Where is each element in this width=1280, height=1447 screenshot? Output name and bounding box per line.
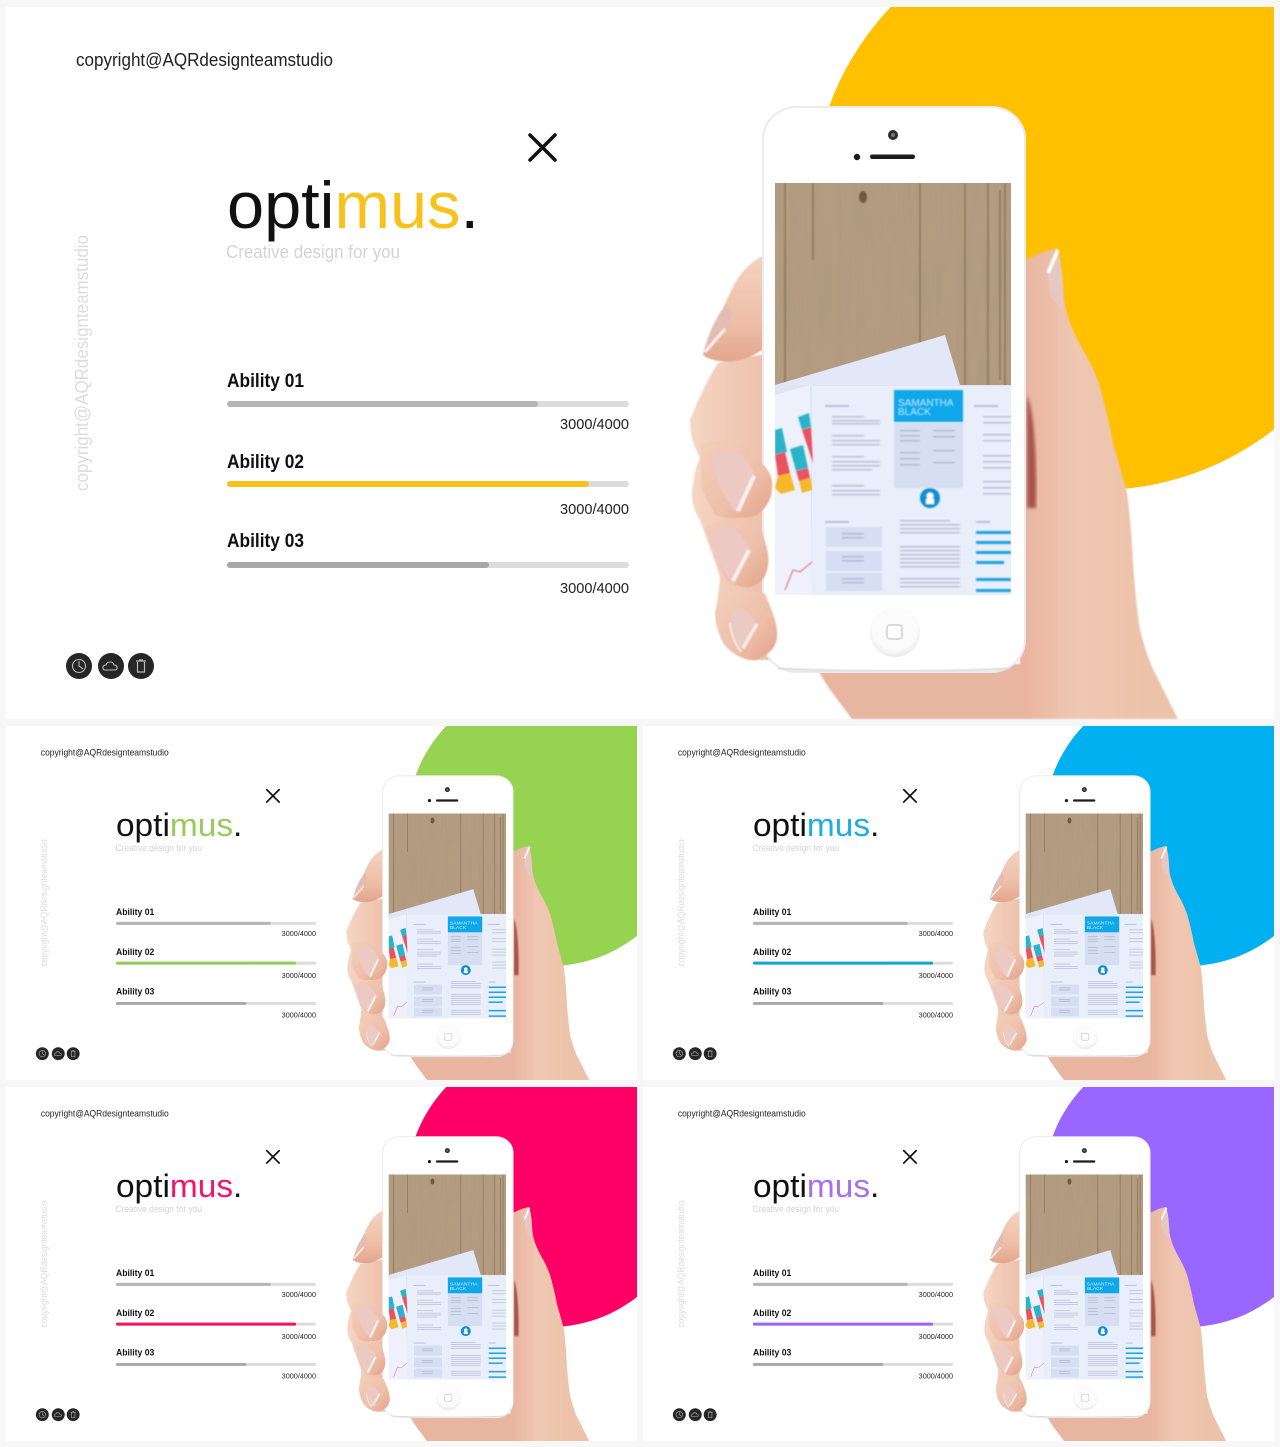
pink circle — [416, 1087, 637, 1326]
ability 01: Ability 01 — [116, 1268, 154, 1279]
ability 03: 3000/4000 — [919, 1371, 953, 1380]
subtitle: Creative design for you — [115, 843, 202, 853]
copyright note: copyright@AQRdesignteamstudio — [41, 1108, 169, 1118]
vertical watermark: copyright@AQRdesignteamstudio — [72, 235, 92, 491]
green circle — [416, 726, 637, 966]
ability 03 — [116, 986, 316, 1019]
ability 01: 3000/4000 — [560, 416, 629, 433]
ability 01: Ability 01 — [753, 1268, 791, 1279]
ability 01: Ability 01 — [116, 907, 154, 918]
ability 03: Ability 03 — [227, 531, 304, 552]
screen heading: SAMANTHA — [1087, 1282, 1114, 1287]
ability 03: Ability 03 — [116, 986, 154, 997]
ability 02: Ability 02 — [227, 452, 304, 473]
ability 01 — [753, 907, 953, 938]
title: optimus. — [116, 1167, 242, 1204]
ability 03: 3000/4000 — [919, 1010, 953, 1019]
screen heading: SAMANTHA — [450, 1282, 477, 1287]
close icon — [267, 790, 279, 802]
ability 03 — [116, 1347, 316, 1380]
subtitle: Creative design for you — [752, 843, 839, 853]
hand holding phone — [346, 1137, 589, 1441]
subtitle: Creative design for you — [226, 242, 400, 262]
copyright note: copyright@AQRdesignteamstudio — [76, 50, 333, 70]
ability 02 — [116, 947, 316, 980]
ability 03 — [753, 1347, 953, 1380]
ability 01: 3000/4000 — [282, 1290, 316, 1299]
title: optimus. — [227, 168, 479, 242]
vertical watermark: copyright@AQRdesignteamstudio — [39, 1200, 49, 1328]
ability 01 — [116, 907, 316, 938]
ability 02: Ability 02 — [753, 947, 791, 958]
icon row — [66, 653, 154, 679]
screen heading: BLACK — [450, 925, 467, 931]
ability 03 — [753, 986, 953, 1019]
hand holding phone — [983, 776, 1226, 1080]
ability 01 — [227, 371, 629, 433]
title: optimus. — [116, 806, 242, 843]
purple circle — [1052, 1087, 1274, 1326]
panel: purple slide — [672, 1087, 1274, 1441]
screen heading: BLACK — [1087, 1286, 1104, 1292]
panel: yellow main slide — [6, 0, 1280, 719]
screen heading: SAMANTHA — [450, 921, 477, 926]
title: optimus. — [753, 806, 879, 843]
yellow circle — [812, 0, 1280, 490]
ability 02 — [116, 1308, 316, 1341]
close icon — [904, 1151, 916, 1163]
ability 02: 3000/4000 — [560, 501, 629, 518]
ability 03 — [227, 531, 629, 597]
ability 02 — [753, 1308, 953, 1341]
ability 02: 3000/4000 — [282, 1332, 316, 1341]
close icon — [904, 790, 916, 802]
close icon — [267, 1151, 279, 1163]
screen heading: SAMANTHA — [898, 398, 954, 409]
ability 03: Ability 03 — [753, 986, 791, 997]
panel: pink slide — [36, 1087, 637, 1441]
ability 01: 3000/4000 — [282, 929, 316, 938]
ability 03: 3000/4000 — [560, 580, 629, 597]
ability 02: Ability 02 — [753, 1308, 791, 1319]
copyright note: copyright@AQRdesignteamstudio — [678, 747, 806, 757]
vertical watermark: copyright@AQRdesignteamstudio — [39, 839, 49, 967]
subtitle: Creative design for you — [752, 1204, 839, 1214]
ability 02: Ability 02 — [116, 1308, 154, 1319]
ability 02: 3000/4000 — [919, 1332, 953, 1341]
screen heading: BLACK — [450, 1286, 467, 1292]
ability 01: Ability 01 — [753, 907, 791, 918]
hand holding phone — [983, 1137, 1226, 1441]
ability 02: 3000/4000 — [282, 971, 316, 980]
ability 02 — [753, 947, 953, 980]
blue circle — [1052, 726, 1274, 966]
ability 01: 3000/4000 — [919, 1290, 953, 1299]
panel: blue slide — [672, 726, 1274, 1080]
ability 01 — [116, 1268, 316, 1299]
ability 02: Ability 02 — [116, 947, 154, 958]
copyright note: copyright@AQRdesignteamstudio — [678, 1108, 806, 1118]
ability 03: 3000/4000 — [282, 1010, 316, 1019]
icon row — [673, 1047, 717, 1060]
ability 01: 3000/4000 — [919, 929, 953, 938]
title: optimus. — [753, 1167, 879, 1204]
icon row — [36, 1047, 80, 1060]
ability 03: Ability 03 — [116, 1347, 154, 1358]
icon row — [673, 1408, 717, 1421]
ability 03: 3000/4000 — [282, 1371, 316, 1380]
subtitle: Creative design for you — [115, 1204, 202, 1214]
screen heading: BLACK — [1087, 925, 1104, 931]
ability 02 — [227, 452, 629, 518]
icon row — [36, 1408, 80, 1421]
close icon — [530, 135, 555, 160]
ability 01 — [753, 1268, 953, 1299]
ability 03: Ability 03 — [753, 1347, 791, 1358]
ability 02: 3000/4000 — [919, 971, 953, 980]
vertical watermark: copyright@AQRdesignteamstudio — [676, 839, 686, 967]
copyright note: copyright@AQRdesignteamstudio — [41, 747, 169, 757]
hand holding phone — [346, 776, 589, 1080]
panel: green slide — [36, 726, 637, 1080]
screen heading: SAMANTHA — [1087, 921, 1114, 926]
hand holding phone — [690, 107, 1178, 719]
vertical watermark: copyright@AQRdesignteamstudio — [676, 1200, 686, 1328]
screen heading: BLACK — [898, 407, 931, 418]
ability 01: Ability 01 — [227, 371, 304, 392]
